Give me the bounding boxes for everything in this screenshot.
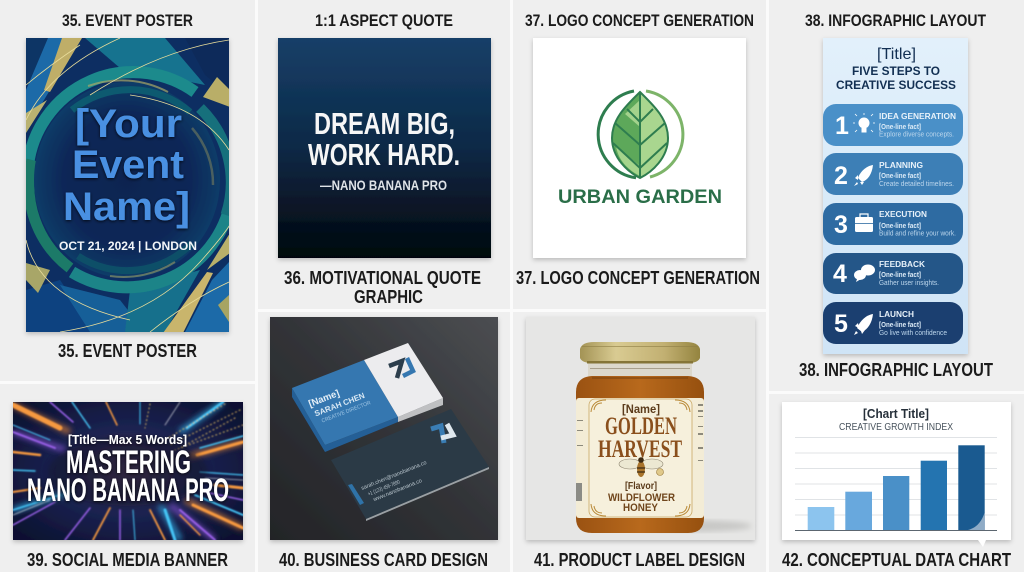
chart subtitle: CREATIVE GROWTH INDEX [839,422,953,433]
step 1: IDEA GENERATION [879,112,956,121]
step 1: Explore diverse concepts. [879,132,954,138]
quote text: —NANO BANANA PRO [320,177,447,193]
logo wordmark: URBAN GARDEN [558,187,722,208]
step 3: 3 [834,211,848,239]
jar shadow [628,520,752,532]
panel: 40 business card design [270,317,498,570]
quote text [308,106,460,193]
infographic title [836,46,956,92]
icon: briefcase [855,214,873,232]
caption: 37 logo concept generation: 37. LOGO CONCEPT GENERATION [516,268,760,288]
caption: 36 motivational quote graphic: GRAPHIC [354,287,423,307]
panel: 38 infographic layout [799,11,993,380]
chart title: [Chart Title] [863,407,929,421]
step 4: FEEDBACK [879,260,925,269]
caption: 40 business card design: 40. BUSINESS CARD DESIGN [279,550,488,570]
bar chart [795,438,997,530]
banner text [27,432,229,508]
back logo [431,424,453,443]
step 5 [823,302,963,344]
step 3: [One-line fact] [879,223,921,230]
step 3: EXECUTION [879,210,927,219]
step 2 [823,153,963,195]
label product title: HARVEST [598,436,682,463]
step 4: Gather user insights. [879,280,939,287]
caption: 36 motivational quote graphic [284,268,481,307]
card name text [307,379,372,427]
step 5: Go live with confidence [879,330,947,337]
step 5: [One-line fact] [879,322,921,329]
banner text: [Title—Max 5 Words] [68,432,187,447]
poster title [63,102,190,229]
infographic title: [Title] [877,46,916,63]
label name: [Name] [622,402,660,416]
step 2: PLANNING [879,161,923,170]
infographic title: FIVE STEPS TO [852,66,940,78]
card logo [389,358,413,378]
step 3: Build and refine your work. [879,230,956,238]
quote text: WORK HARD. [308,137,460,172]
contact text: www.nanobanana.co [372,478,423,504]
step 4: 4 [833,260,847,288]
card name text: CREATIVE DIRECTOR [321,400,372,424]
business card stack: front [292,343,443,452]
caption: 39 social media banner: 39. SOCIAL MEDIA BANNER [27,550,228,570]
step 2: [One-line fact] [879,173,921,180]
step 5: 5 [834,310,848,338]
banner text: MASTERING [66,444,191,480]
logo card [533,38,746,258]
icon: leaf in ring [598,91,683,178]
honey jar [576,342,704,533]
icon: launch rocket [854,314,873,335]
card name text: SARAH CHEN [313,391,366,418]
panel: 39 social media banner [13,402,243,570]
business card: back [331,409,489,521]
step 1 [823,104,963,146]
panel: 37 logo concept [516,11,760,288]
step 2: Create detailed timelines. [879,181,954,188]
caption: 35 event poster: 35. EVENT POSTER [58,341,197,361]
label flavor: [Flavor] [625,481,657,492]
label product title: GOLDEN [605,413,677,440]
caption: 36 motivational quote graphic: 36. MOTIVATIONAL QUOTE [284,268,481,288]
poster title: Name] [63,185,190,229]
infographic title: CREATIVE SUCCESS [836,80,956,92]
label flavor: WILDFLOWER [608,492,675,504]
heading: 38 infographic layout: 38. INFOGRAPHIC LAYOUT [805,11,987,30]
accent stripe [348,484,364,505]
quote text: DREAM BIG, [314,106,455,141]
label product title [598,413,682,463]
step 1: 1 [835,112,849,140]
card name text: [Name] [307,388,341,410]
panel: 36 motivational quote [278,11,491,307]
poster artwork [26,38,235,333]
step 2: 2 [834,162,848,190]
icon: rocket [854,165,873,186]
dark desk background [270,317,498,540]
contact text [361,460,433,506]
heading: 35 event poster: 35. EVENT POSTER [62,11,193,30]
quote card [278,38,491,258]
banner artwork [13,402,243,540]
contact text: +1 (123) 456-7890 [367,479,401,498]
panel: 35 event poster [26,11,235,361]
jar label [576,398,704,518]
caption: 41 product label design: 41. PRODUCT LABEL DESIGN [534,550,745,570]
infographic card [823,38,968,354]
poster date: OCT 21, 2024 | LONDON [59,239,197,253]
label flavor: HONEY [623,502,659,514]
icon: speech bubbles [854,264,875,282]
step 5: LAUNCH [879,310,914,319]
jar lid [580,342,700,363]
step 4 [823,253,963,294]
poster title: [Your [75,102,182,146]
icon: bee [619,457,664,477]
step 3 [823,203,963,245]
heading: 37 logo concept generation: 37. LOGO CONCEPT GENERATION [525,11,754,30]
poster title: Event [72,143,184,187]
panel: 41 product label design [526,317,755,570]
chart card [782,402,1011,547]
step 1: [One-line fact] [879,124,921,131]
banner text: NANO BANANA PRO [27,472,229,508]
icon: light bulb [853,113,875,132]
contact text: sarah.chen@nanobanana.co [361,460,428,492]
heading: 1:1 aspect quote: 1:1 ASPECT QUOTE [315,11,453,30]
jar backdrop [526,317,755,540]
panel: 42 conceptual data chart [782,402,1011,570]
label flavor [608,481,675,514]
step 4: [One-line fact] [879,272,921,279]
